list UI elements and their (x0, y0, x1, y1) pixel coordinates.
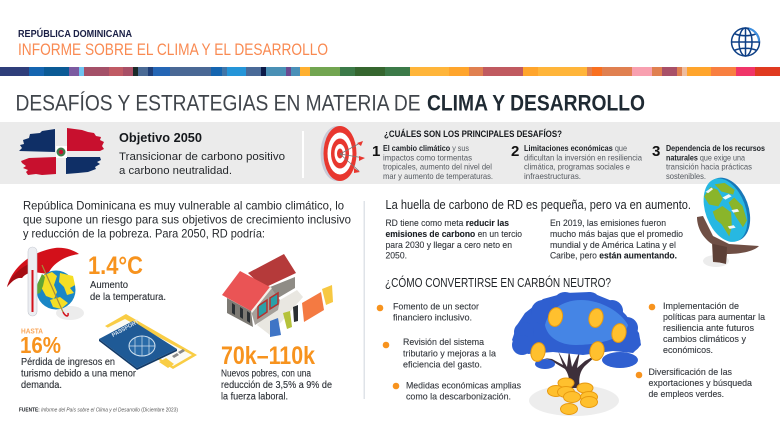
panel: objective and challenges (0, 122, 780, 184)
strategy: tax system: eficiencia del gasto. (403, 360, 482, 370)
report title: INFORME SOBRE EL CLIMA Y EL DESARROLLO (18, 41, 328, 59)
icon: target with arrows (320, 126, 365, 181)
header (18, 27, 328, 59)
main title: CLIMA Y DESARROLLO (427, 90, 645, 116)
challenge 3 (652, 143, 765, 181)
emissions text: Caribe, pero están aumentando. (550, 250, 677, 262)
emissions text (550, 218, 683, 262)
carbon target text (386, 218, 522, 262)
icon: passport and ticket: PASSPORT (111, 319, 141, 339)
strategy: export diversification: de empleos verdes. (648, 389, 724, 400)
carbon footprint section (386, 198, 691, 262)
strategy: resilience policies (649, 301, 766, 356)
strategy: tax system: tributario y mejoras a la (403, 348, 497, 360)
stat: new poor: reducción de 3,5% a 9% de (221, 380, 333, 391)
icon: Dominican Republic flag (19, 128, 104, 175)
main title: DESAFÍOS Y ESTRATEGIAS EN MATERIA DE (16, 90, 420, 116)
carbon target text: 2050. (386, 250, 407, 262)
strategy: resilience policies: económicos. (663, 345, 713, 356)
strategy: financial sector: Fomento de un sector (393, 302, 480, 312)
challenge 2 (511, 143, 642, 181)
emissions text: mundial y de América Latina y el (550, 240, 676, 251)
icon: money tree (512, 292, 641, 416)
country label: REPÚBLICA DOMINICANA (18, 27, 132, 40)
stat: temperature (88, 252, 166, 303)
challenge 3: naturales que exige una (666, 153, 745, 162)
challenge 1: 1 (372, 143, 380, 160)
stat: new poor: 70k–110k (221, 342, 315, 370)
carbon footprint heading: La huella de carbono de RD es pequeña, pero va en aumento. (386, 198, 691, 212)
carbon target text: emisiones de carbono en un tercio (386, 229, 522, 240)
challenge 1: El cambio climático y sus (383, 144, 469, 153)
challenge 3: sostenibles. (666, 172, 706, 181)
strategy: financial sector (377, 302, 480, 324)
strategy: tax system (383, 337, 497, 370)
intro paragraph: que supone un riesgo para sus objetivos de crecimiento inclusivo (23, 212, 351, 226)
stat: temperature: de la temperatura. (90, 292, 166, 303)
objective text: a carbono neutralidad. (119, 165, 232, 177)
challenge 3: 3 (652, 143, 660, 160)
color strip (0, 67, 780, 76)
objective text: Objetivo 2050 (119, 130, 202, 145)
strategy: export diversification (636, 367, 753, 400)
stat: tourism (20, 329, 137, 391)
challenge 1: mar y aumento de temperaturas. (383, 172, 493, 181)
strategy: resilience policies: resiliencia ante futuros (663, 323, 754, 334)
objective text: Transicionar de carbono positivo (119, 151, 285, 163)
strategy: resilience policies: políticas para aumentar la (663, 312, 766, 323)
challenge 1: impactos como tormentas (383, 153, 472, 162)
column divider (364, 201, 365, 399)
stat: new poor: la fuerza laboral. (221, 392, 288, 402)
strategy: resilience policies: Implementación de (663, 301, 739, 312)
icon: umbrella, thermometer and globe (7, 247, 84, 320)
strategy: economic measures: Medidas económicas amplias (406, 381, 521, 392)
divider (302, 131, 304, 178)
stat: tourism: demanda. (21, 380, 62, 391)
challenge 2: infraestructuras. (524, 172, 581, 181)
stat: tourism: turismo debido a una menor (21, 368, 137, 380)
challenge 1: tropicales, aumento del nivel del (383, 163, 492, 172)
stat: tourism: 16% (20, 332, 61, 358)
stat: tourism: HASTA (21, 329, 43, 336)
strategy: export diversification: exportaciones y búsqueda (648, 378, 753, 389)
challenge 3: transición hacia prácticas (666, 163, 752, 172)
icon: damaged house with clothesline (222, 254, 333, 337)
intro paragraph: República Dominicana es muy vulnerable al cambio climático, lo (23, 198, 344, 212)
source note: FUENTE: Informe del País sobre el Clima y el Desarrollo (Diciembre 2023) (19, 408, 178, 414)
carbon target text: para 2030 y llegar a cero neto en (386, 240, 512, 251)
stat: temperature: Aumento (90, 280, 129, 291)
emissions text: mucho más bajas que el promedio (550, 229, 683, 240)
icon: passport and ticket (99, 314, 197, 370)
stat: temperature: 1.4°C (88, 252, 143, 280)
challenge 2: 2 (511, 143, 519, 160)
objective text (119, 130, 285, 177)
challenges (372, 129, 765, 181)
challenge 2: Limitaciones económicas que (524, 144, 627, 153)
carbon neutral heading: ¿CÓMO CONVERTIRSE EN CARBÓN NEUTRO? (385, 275, 611, 290)
stat: tourism: Pérdida de ingresos en (21, 357, 115, 368)
stat: new poor (221, 342, 333, 402)
intro paragraph: y reducción de la pobreza. Para 2050, RD podría: (23, 226, 265, 240)
challenge 3: Dependencia de los recursos (666, 144, 765, 153)
challenge 1 (372, 143, 493, 181)
strategy: financial sector: financiero inclusivo. (393, 312, 472, 324)
carbon target text: RD tiene como meta reducir las (386, 218, 509, 229)
strategy: resilience policies: cambios climáticos y (663, 334, 746, 345)
challenge 2: climática, programas sociales e (524, 163, 630, 172)
intro paragraph (23, 198, 351, 240)
strategy: export diversification: Diversificación de las (648, 367, 732, 378)
emissions text: En 2019, las emisiones fueron (550, 218, 666, 229)
challenge 2: dificultan la inversión en resiliencia (524, 153, 642, 162)
strategy: economic measures (393, 381, 521, 402)
challenges heading: ¿CUÁLES SON LOS PRINCIPALES DESAFÍOS? (384, 129, 562, 140)
strategy: economic measures: como la descarbonización. (406, 392, 511, 402)
strategy: tax system: Revisión del sistema (403, 337, 485, 348)
stat: new poor: Nuevos pobres, con una (221, 368, 311, 380)
icon: World Bank globe logo (732, 28, 760, 56)
icon: hands holding earth (695, 171, 759, 267)
